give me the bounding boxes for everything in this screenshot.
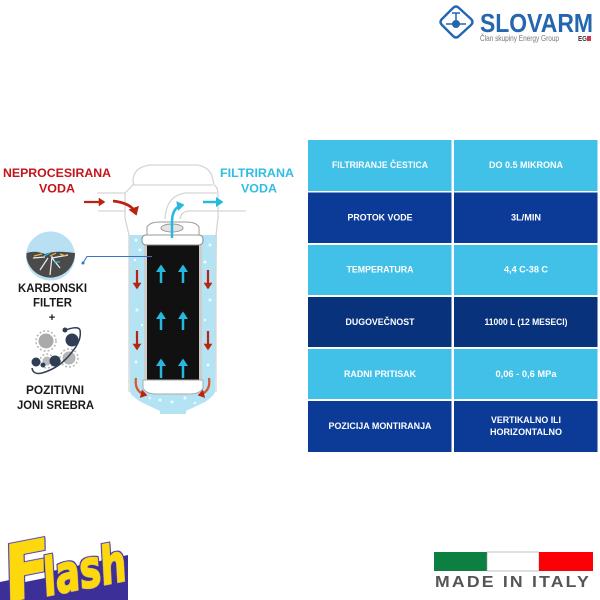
icon: silver ions [32, 328, 80, 373]
row 2: PROTOK VODE [348, 212, 412, 222]
row 3 [308, 245, 598, 295]
row 4 [308, 297, 598, 347]
label: filtered water [220, 168, 294, 196]
logo: Flash [0, 508, 132, 600]
logo: Slovarm: EG [578, 36, 587, 43]
cartridge [147, 244, 199, 382]
label: filtered water: VODA [241, 184, 277, 196]
label: carbon filter: FILTER [33, 296, 72, 310]
row 2: 3L/MIN [511, 212, 541, 222]
row 6 [308, 401, 598, 452]
row 6: POZICIJA MONTIRANJA [328, 421, 432, 431]
row 6: HORIZONTALNO [490, 427, 562, 437]
row 1 [308, 140, 598, 191]
label: unprocessed water [3, 168, 111, 196]
row 4: 11000 L (12 MESECI) [484, 317, 568, 327]
row 3: 4,4 C-38 C [504, 264, 548, 274]
logo: Slovarm: Član skupiny Energy Group [480, 34, 559, 43]
housing outline [97, 165, 218, 392]
cyan arrows up [161, 266, 183, 378]
label: silver ions: JONI SREBRA [17, 398, 94, 412]
badge: made in Italy: MADE IN ITALY [435, 574, 591, 591]
water speckles [134, 238, 212, 404]
label: carbon filter: + [49, 312, 55, 324]
row 3: TEMPERATURA [346, 264, 414, 274]
icon: carbon filter circle [26, 232, 75, 280]
label: unprocessed water: NEPROCESIRANA [3, 168, 111, 180]
logo: Slovarm [440, 6, 593, 43]
row 5 [308, 349, 598, 399]
arrow: outlet [172, 202, 222, 238]
badge: made in Italy [434, 552, 593, 591]
label: silver ions: POZITIVNI [26, 383, 84, 397]
row 1: DO 0.5 MIKRONA [489, 160, 563, 170]
arrow: inlet [84, 201, 136, 214]
row 2 [308, 192, 598, 243]
red arrows down [136, 270, 209, 395]
row 6: VERTIKALNO ILI [491, 415, 561, 425]
spec table [308, 140, 598, 452]
water [129, 235, 217, 414]
leader line [82, 256, 152, 264]
label: unprocessed water: VODA [39, 184, 75, 196]
label: silver ions [17, 383, 94, 412]
filter housing diagram [84, 165, 246, 414]
label: carbon filter: KARBONSKI [18, 281, 87, 295]
row 5: 0,06 - 0,6 MPa [496, 369, 558, 379]
label: filtered water: FILTRIRANA [220, 168, 294, 180]
label: carbon filter [18, 281, 87, 324]
row 1: FILTRIRANJE ČESTICA [332, 159, 428, 170]
row 5: RADNI PRITISAK [344, 369, 416, 379]
row 4: DUGOVEČNOST [346, 316, 415, 327]
